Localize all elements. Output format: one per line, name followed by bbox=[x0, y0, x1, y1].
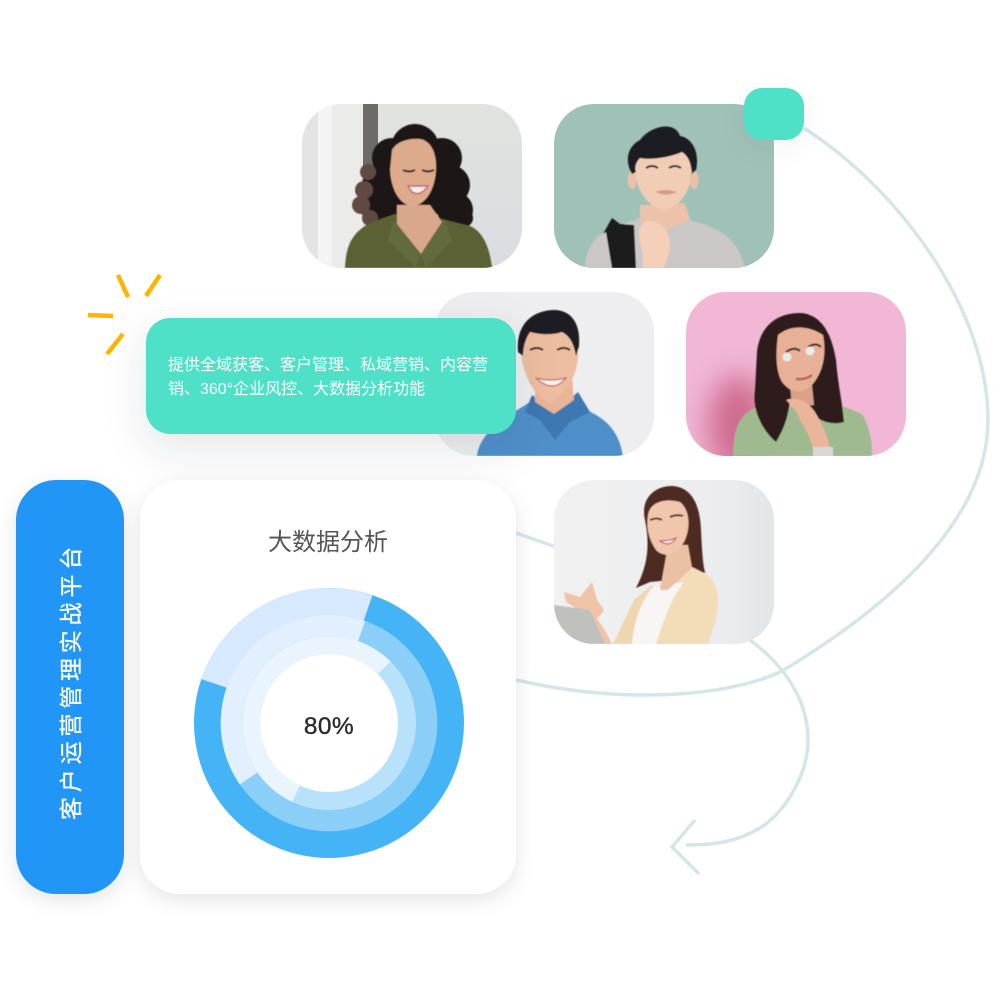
yellow sparkle accent bbox=[88, 275, 160, 354]
photo: thoughtful woman on pink background bbox=[686, 292, 906, 456]
photo: smiling man in denim shirt bbox=[434, 292, 654, 456]
pill title: 客户运营管理实战平台 bbox=[58, 542, 84, 820]
teal node bbox=[744, 88, 804, 140]
blue vertical label pill bbox=[16, 480, 124, 894]
connector curve: teal node to card bbox=[516, 128, 988, 695]
connector curve: card to photo bbox=[516, 533, 556, 547]
callout text: 提供全域获客、客户管理、私域营销、内容营 bbox=[168, 356, 488, 374]
donut chart bbox=[208, 602, 450, 844]
card heading: 大数据分析 bbox=[268, 529, 388, 556]
teal callout box bbox=[146, 318, 516, 434]
donut center value: 80% bbox=[304, 713, 354, 740]
photo: woman presenting with tablet bbox=[554, 480, 774, 644]
photo: woman with curly hair bbox=[302, 104, 522, 268]
panel: big data analysis card bbox=[140, 480, 516, 894]
callout text: 销、360°企业风控、大数据分析功能 bbox=[168, 380, 425, 398]
arrow: curve from photo to arrowhead bbox=[672, 640, 808, 874]
photo: young man with backpack bbox=[554, 104, 774, 268]
